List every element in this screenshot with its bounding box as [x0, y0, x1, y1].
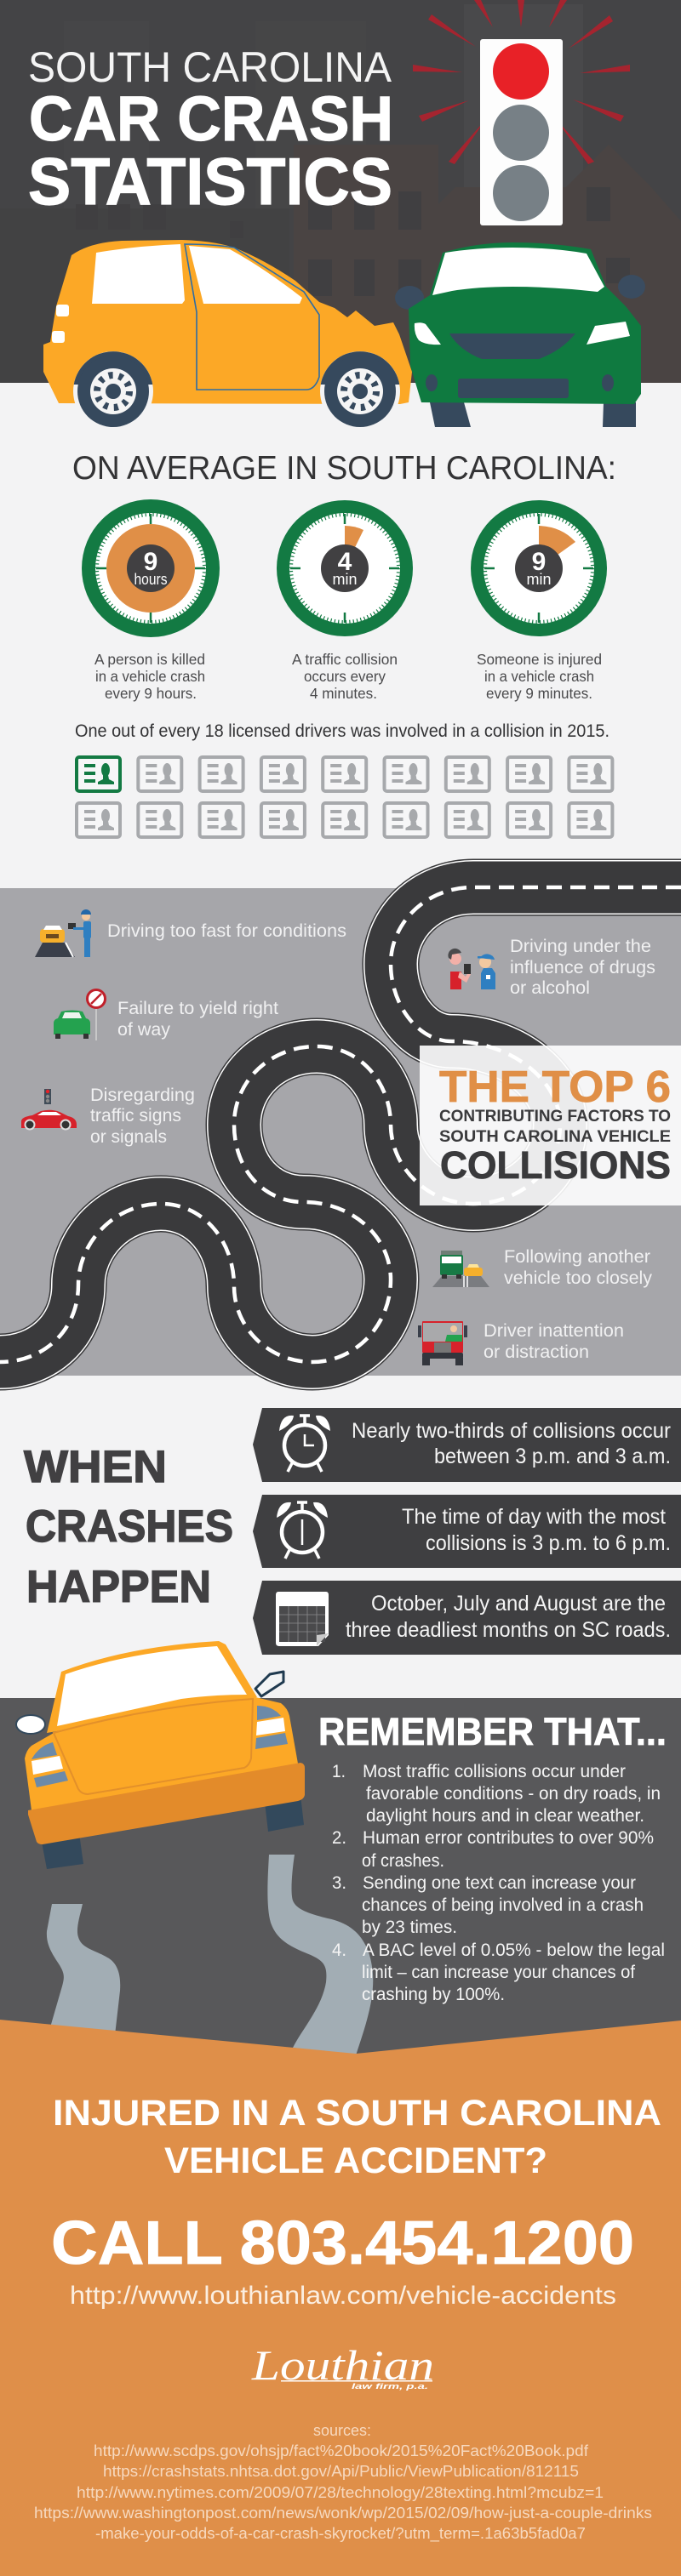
caption: killed: A person is killed — [94, 651, 205, 668]
panel: top 6 title: COLLISIONS — [440, 1143, 671, 1187]
text: following too closely — [504, 1247, 653, 1288]
list: remember items: 2. — [332, 1827, 346, 1848]
panel: remember that background — [0, 1698, 681, 2055]
heading: when crashes happen: WHEN — [24, 1442, 167, 1492]
list: remember items: Sending one text can increase your — [363, 1872, 636, 1893]
panel: top 6 title: SOUTH CAROLINA VEHICLE — [439, 1128, 671, 1146]
text: driving under the influence — [510, 937, 655, 998]
list: remember items: crashing by 100%. — [362, 1984, 505, 2004]
clock: 4 min: min — [332, 571, 358, 588]
list: remember items: Human error contributes to over 90% — [363, 1827, 654, 1848]
title: SOUTH CAROLINA — [28, 43, 392, 91]
clock: 9 hours: 9 — [144, 548, 157, 576]
text: driving too fast: Driving too fast for conditions — [107, 921, 346, 941]
list: remember items: favorable conditions - on dry roads, in — [366, 1783, 661, 1804]
text: phone number: CALL 803.454.1200 — [51, 2209, 634, 2277]
icon: officer with radar and car — [35, 909, 91, 957]
panel: bar time of day: The time of day with the most — [402, 1505, 666, 1529]
text: sources: https://crashstats.nhtsa.dot.gov/Api/Public/ViewPublication/812115 — [103, 2463, 579, 2480]
title — [28, 43, 393, 219]
list: remember items: limit – can increase your chances of — [362, 1962, 635, 1982]
list: remember items: 3. — [332, 1872, 346, 1893]
list: remember items: 4. — [332, 1940, 346, 1960]
icon: distracted truck driver — [418, 1321, 467, 1365]
icon: red car at traffic light — [21, 1089, 77, 1130]
list: remember items: chances of being involved in a crash — [362, 1895, 644, 1915]
panel: bar two-thirds: Nearly two-thirds of collisions occur — [352, 1419, 671, 1443]
text: following too closely: vehicle too closely — [504, 1268, 653, 1288]
text: sources: -make-your-odds-of-a-car-crash-skyrocket/?utm_term=.1a63b5fad0a7 — [95, 2525, 586, 2543]
text: disregarding: or signals — [90, 1127, 167, 1147]
heading: injured: INJURED IN A SOUTH CAROLINA — [53, 2093, 661, 2134]
text: sources — [34, 2422, 652, 2543]
text: driving under the influence: Driving under the — [510, 937, 651, 956]
caption: injured: every 9 minutes. — [486, 685, 592, 702]
title: CAR CRASH — [29, 83, 393, 154]
panel: bar deadliest months — [253, 1581, 681, 1655]
panel: bar deadliest months: October, July and August are the — [371, 1592, 666, 1616]
traffic light — [480, 39, 563, 225]
heading: remember that: REMEMBER THAT... — [318, 1710, 667, 1753]
panel: bar time of day: collisions is 3 p.m. to 6 p.m. — [426, 1531, 671, 1555]
panel: bar two-thirds: between 3 p.m. and 3 a.m. — [434, 1445, 671, 1468]
panel: bar time of day — [253, 1495, 681, 1568]
text: sources: sources: — [313, 2422, 371, 2439]
heading: when crashes happen — [24, 1442, 233, 1612]
text: driver inattention — [484, 1321, 624, 1362]
text: sources: http://www.nytimes.com/2009/07/28/technology/28texting.html?mcubz=1 — [77, 2484, 604, 2501]
caption: injured: Someone is injured — [477, 651, 602, 668]
icon: green car with no-turn sign — [54, 990, 106, 1040]
text: disregarding: Disregarding — [90, 1086, 195, 1105]
text: following too closely: Following another — [504, 1247, 650, 1267]
list: remember items — [332, 1761, 665, 2004]
list: remember items: by 23 times. — [362, 1917, 457, 1937]
clock: 9 hours — [82, 499, 220, 637]
caption: killed: in a vehicle crash — [95, 668, 205, 685]
clock: 9 hours: hours — [134, 571, 167, 588]
caption: collision: 4 minutes. — [310, 685, 377, 702]
license icon grid — [77, 757, 612, 837]
list: remember items: Most traffic collisions occur under — [363, 1761, 626, 1781]
panel: top 6 title — [420, 1046, 681, 1205]
clock: 4 min: 4 — [338, 548, 352, 576]
text: failure to yield: of way — [117, 1020, 171, 1040]
panel: bar deadliest months: three deadliest months on SC roads. — [346, 1618, 671, 1642]
caption: injured: in a vehicle crash — [484, 668, 594, 685]
text: website url: http://www.louthianlaw.com/vehicle-accidents — [70, 2282, 616, 2310]
icon: green car front view — [409, 242, 641, 427]
list: remember items: 1. — [332, 1761, 346, 1781]
text: sources: http://www.scdps.gov/ohsjp/fact%20book/2015%20Fact%20Book.pdf — [94, 2442, 589, 2459]
text: driver inattention: or distraction — [484, 1342, 589, 1362]
clock: 9 min: 9 — [532, 548, 546, 576]
heading: on average: ON AVERAGE IN SOUTH CAROLINA: — [72, 450, 616, 487]
text: driver inattention: Driver inattention — [484, 1321, 624, 1341]
panel: top 6 title: CONTRIBUTING FACTORS TO — [439, 1108, 671, 1126]
icon: truck following car — [432, 1251, 489, 1287]
icon: orange car side view — [43, 240, 412, 431]
heading: injured — [53, 2093, 661, 2181]
clock: 4 min — [277, 500, 413, 636]
text: driving under the influence: or alcohol — [510, 978, 590, 998]
title: STATISTICS — [28, 144, 392, 219]
list: remember items: A BAC level of 0.05% - below the legal — [363, 1940, 665, 1960]
text: failure to yield — [117, 999, 278, 1040]
caption: collision: A traffic collision — [292, 651, 398, 668]
text: failure to yield: Failure to yield right — [117, 999, 278, 1018]
text: disregarding — [90, 1086, 195, 1147]
panel: contributing factors band — [0, 888, 681, 1376]
list: remember items: daylight hours and in clear weather. — [366, 1805, 644, 1826]
icon: left skid mark — [47, 1904, 120, 2035]
icon: right skid mark — [267, 1855, 373, 2055]
icon: orange car rear view — [16, 1641, 305, 1869]
text: one out of every 18: One out of every 18 licensed drivers was involved in a collision in 2015. — [75, 721, 609, 741]
panel: header — [0, 0, 681, 383]
text: sources: https://www.washingtonpost.com/news/wonk/wp/2015/02/09/how-just-a-couple-drinks — [34, 2505, 652, 2522]
logo: louthian: law firm, p.a. — [352, 2382, 428, 2391]
winding road — [0, 887, 681, 1362]
caption: killed — [94, 651, 205, 702]
clock: 9 min: min — [526, 571, 552, 588]
heading: injured: VEHICLE ACCIDENT? — [164, 2140, 547, 2181]
caption: injured — [477, 651, 602, 702]
panel: top 6 title: THE TOP 6 — [439, 1063, 671, 1112]
icon: light rays — [413, 0, 630, 164]
icon: breathalyzer test — [448, 949, 495, 989]
text: driving under the influence: influence of drugs — [510, 958, 655, 977]
panel: bar two-thirds — [253, 1408, 681, 1482]
caption: collision: occurs every — [304, 668, 386, 685]
text: disregarding: traffic signs — [90, 1106, 181, 1126]
heading: when crashes happen: CRASHES — [26, 1502, 233, 1552]
logo: louthian: Louthian — [251, 2341, 434, 2389]
panel: call to action background — [0, 2020, 681, 2576]
caption: killed: every 9 hours. — [105, 685, 197, 702]
clock: 9 min — [471, 500, 607, 636]
caption: collision — [292, 651, 398, 702]
heading: when crashes happen: HAPPEN — [26, 1562, 211, 1612]
list: remember items: of crashes. — [362, 1850, 444, 1871]
icon: green car mirrors — [395, 275, 645, 310]
